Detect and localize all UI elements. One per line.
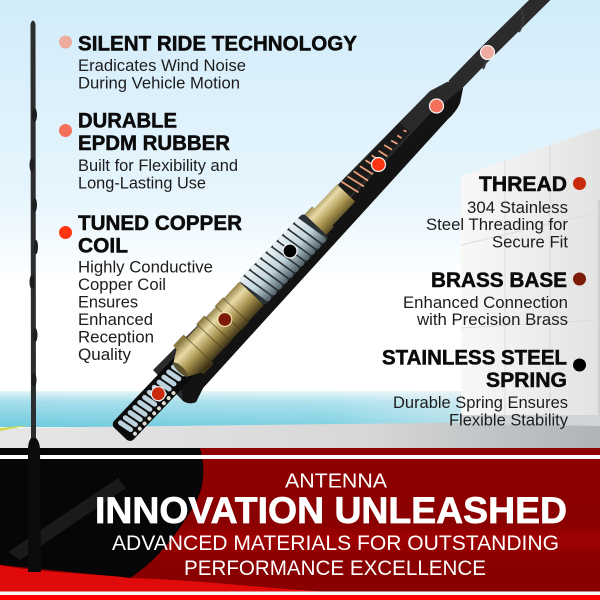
feature: tuned copper coil: COIL bbox=[78, 234, 128, 258]
feature: brass base: with Precision Brass bbox=[416, 311, 568, 329]
banner: heading text: INNOVATION UNLEASHED bbox=[95, 490, 567, 531]
background: sky bbox=[0, 0, 600, 392]
feature: silent ride technology: SILENT RIDE TECHNOLOGY bbox=[78, 32, 357, 56]
callout dot: copper coil on antenna bbox=[372, 158, 386, 172]
stainless steel spring bbox=[238, 213, 329, 306]
banner: heading text: ANTENNA bbox=[285, 470, 388, 492]
copper coil bbox=[336, 121, 413, 200]
callout dot: spring on antenna bbox=[283, 244, 297, 258]
feature: tuned copper coil: Quality bbox=[78, 346, 132, 364]
feature: durable EPDM rubber bbox=[59, 108, 238, 192]
callout dot: EPDM rubber on antenna bbox=[430, 99, 444, 113]
banner: background bbox=[0, 448, 600, 600]
brass base bbox=[163, 279, 267, 386]
feature: tuned copper coil: Highly Conductive bbox=[78, 258, 213, 276]
banner: heading text: PERFORMANCE EXCELLENCE bbox=[184, 556, 486, 580]
callout dot: brass on antenna bbox=[218, 312, 232, 326]
main antenna: cutaway body bbox=[153, 82, 463, 403]
feature: stainless steel spring: Durable Spring Ensures bbox=[393, 394, 568, 412]
background: road bbox=[0, 421, 600, 449]
background: sea bbox=[0, 391, 600, 427]
feature: silent ride technology: Eradicates Wind Noise bbox=[78, 57, 246, 75]
banner: heading text: ADVANCED MATERIALS FOR OUTSTANDING bbox=[112, 531, 559, 555]
feature: thread: Secure Fit bbox=[492, 234, 568, 252]
feature: stainless steel spring: SPRING bbox=[486, 368, 567, 392]
feature: brass base: BRASS BASE bbox=[431, 268, 567, 292]
banner: heading text bbox=[95, 470, 567, 580]
background: concrete building bbox=[461, 128, 600, 426]
internals: axis-aligned group bbox=[104, 115, 422, 447]
upper brass cylinder bbox=[304, 182, 357, 236]
feature: stainless steel spring: Flexible Stability bbox=[449, 412, 569, 430]
feature: thread: Steel Threading for bbox=[426, 216, 568, 234]
feature: tuned copper coil: Copper Coil bbox=[78, 276, 166, 294]
feature: durable EPDM rubber: DURABLE bbox=[78, 108, 177, 132]
feature: durable EPDM rubber: EPDM RUBBER bbox=[78, 131, 230, 155]
callout dot: thread on antenna bbox=[151, 387, 165, 401]
main antenna: rod bbox=[454, 0, 560, 86]
feature: brass base: Enhanced Connection bbox=[403, 294, 568, 312]
threaded screw bbox=[111, 356, 195, 443]
callout dot: silent ride on antenna bbox=[480, 46, 494, 60]
feature: durable EPDM rubber: Long-Lasting Use bbox=[78, 174, 206, 192]
feature: stainless steel spring: STAINLESS STEEL bbox=[382, 346, 567, 370]
feature: tuned copper coil: Enhanced bbox=[78, 311, 153, 329]
feature: tuned copper coil bbox=[59, 211, 242, 364]
feature: tuned copper coil: Ensures bbox=[78, 294, 138, 312]
feature: thread: 304 Stainless bbox=[467, 199, 568, 217]
feature: stainless steel spring bbox=[382, 346, 586, 430]
feature: durable EPDM rubber: Built for Flexibility and bbox=[78, 157, 238, 175]
feature: tuned copper coil: TUNED COPPER bbox=[78, 211, 242, 235]
feature: thread bbox=[426, 172, 586, 252]
left antenna bbox=[28, 20, 41, 572]
feature: silent ride technology: During Vehicle Motion bbox=[78, 74, 240, 92]
feature: thread: THREAD bbox=[479, 172, 567, 196]
feature: brass base bbox=[403, 268, 586, 329]
feature: tuned copper coil: Reception bbox=[78, 328, 154, 346]
feature: silent ride technology bbox=[59, 32, 357, 92]
